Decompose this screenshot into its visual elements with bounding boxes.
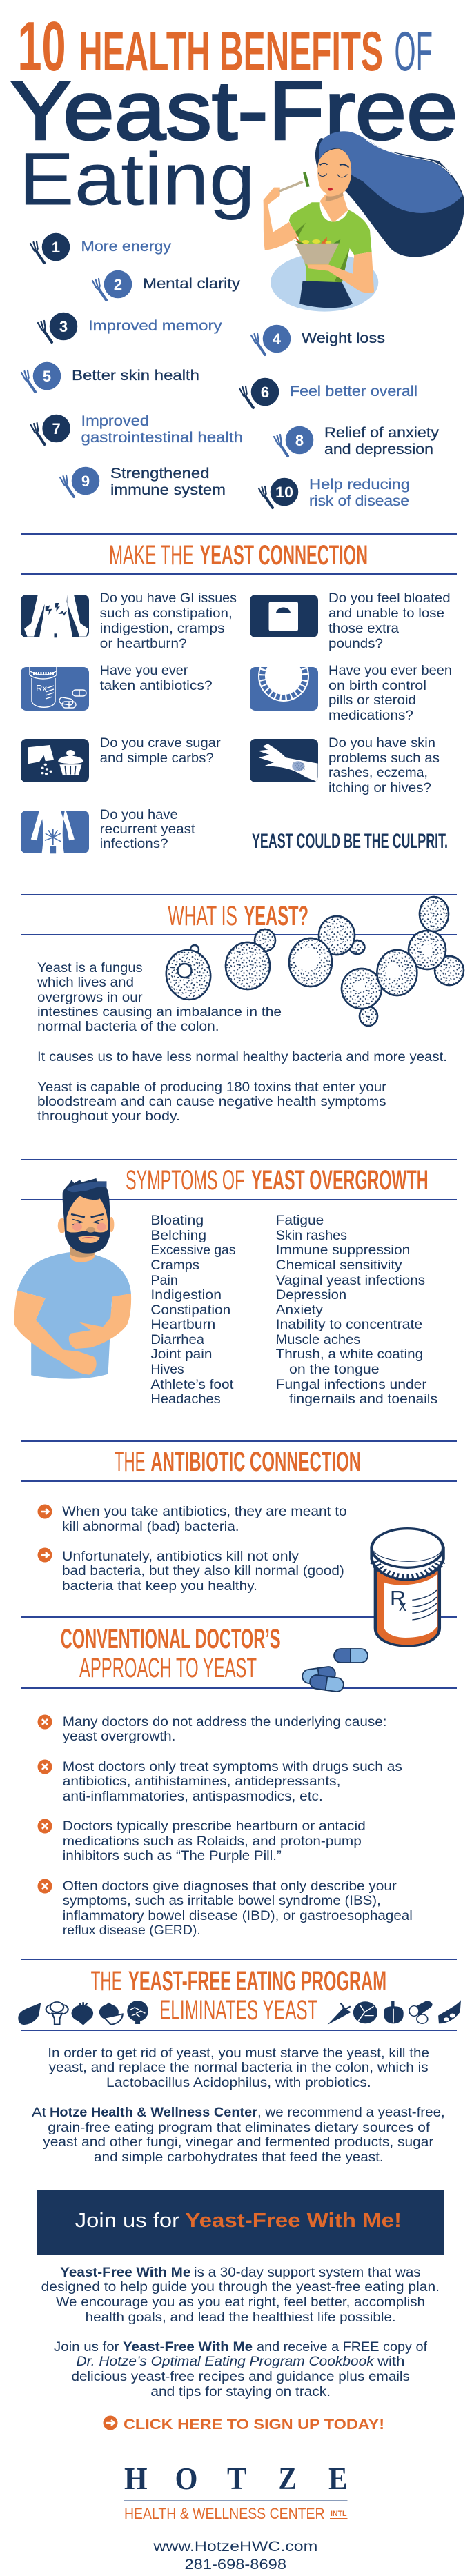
text block: symptoms left column: Heartburn (150, 1318, 215, 1332)
question: yeast infections: Do you have (100, 808, 178, 822)
text block: doctor bullets: medications such as Rolaids, and proton-pump (63, 1834, 362, 1849)
text block: yeast-free with me (41, 2266, 440, 2399)
text block: doctor bullets: reflux disease (GERD). (63, 1923, 201, 1938)
benefit 10: risk of disease (309, 493, 409, 509)
text block: yeast-free program: Lactobacillus Acidophilus, with probiotics. (106, 2076, 371, 2090)
heading: what is yeast: YEAST? (244, 901, 308, 931)
text block: symptoms right column: Chemical sensitivity (276, 1258, 402, 1273)
title: OF (395, 21, 433, 83)
text block: symptoms left column: Headaches (150, 1392, 221, 1407)
benefit 6: Feel better overall (290, 384, 417, 399)
contact details: www.HotzeHWC.com (153, 2539, 317, 2555)
icon: arm with skin rash (250, 739, 318, 782)
benefit 9 (60, 466, 226, 498)
heading: the antibiotic connection (115, 1447, 361, 1477)
benefit 8 (274, 425, 440, 457)
text block: doctor bullets: inflammatory bowel disease (IBD), or gastroesophageal (63, 1909, 413, 1923)
benefit 2: 2 (114, 276, 122, 293)
text block: yeast-free with me: Yeast-Free With Me (123, 2340, 253, 2355)
heading: conventional doctor's approach to yeast: CONVENTIONAL DOCTOR’S (61, 1624, 281, 1654)
text block: yeast-free with me: Dr. Hotze’s Optimal Eating Program Cookbook (76, 2355, 375, 2369)
icon: pill bottle (21, 667, 89, 711)
question: birth control: pills or steroid (328, 693, 416, 708)
benefit 8: 8 (295, 432, 304, 449)
text block: yeast-free program: , we recommend a yeast-free, (257, 2106, 445, 2120)
text block: symptoms right column: Depression (276, 1288, 346, 1302)
question: GI issues: Do you have GI issues (100, 591, 237, 606)
question: birth control: on birth control (328, 679, 426, 693)
benefits list (21, 232, 440, 509)
text block: symptoms left column: Indigestion (150, 1288, 222, 1302)
contact details: 281-698-8698 (185, 2557, 286, 2573)
text block: what is yeast: intestines causing an imbalance in the (37, 1005, 282, 1020)
icons: vegetables right (328, 2000, 461, 2025)
question: yeast infections: infections? (100, 837, 168, 851)
text block: antibiotic bullets: bacteria that keep you healthy. (62, 1579, 257, 1594)
text block: doctor bullets: yeast overgrowth. (63, 1730, 175, 1744)
illustration: capsules (302, 1649, 368, 1692)
text block: what is yeast: throughout your body. (37, 1109, 180, 1124)
logo: hotze: INTL (331, 2510, 347, 2518)
text block: what is yeast: It causes us to have less normal healthy bacteria and more yeast. (37, 1050, 447, 1064)
logo: hotze: H (124, 2461, 148, 2496)
text block: symptoms left column: Joint pain (150, 1347, 212, 1362)
banner: join us: Join us for (75, 2210, 179, 2232)
text block: symptoms left column: Pain (150, 1274, 178, 1288)
heading: make the yeast connection (109, 540, 368, 571)
benefit 7: gastrointestinal health (81, 430, 243, 446)
text block: yeast-free with me: delicious yeast-free recipes and guidance plus emails (72, 2370, 410, 2384)
text block: yeast-free with me: health goals, and lead the healthiest life possible. (86, 2310, 396, 2325)
text block: antibiotic bullets (37, 1504, 347, 1594)
benefit 3: 3 (59, 318, 68, 335)
question: antibiotics: taken antibiotics? (100, 679, 213, 693)
question: yeast infections (100, 808, 195, 851)
text block: symptoms left column: Athlete’s foot (150, 1378, 234, 1392)
text block: antibiotic bullets: When you take antibiotics, they are meant to (62, 1505, 347, 1519)
text block: yeast-free program: In order to get rid of yeast, you must starve the yeast, kill the (48, 2046, 429, 2061)
text block: doctor bullets: Most doctors only treat symptoms with drugs such as (63, 1760, 402, 1774)
question: skin (328, 736, 440, 795)
benefit 1: 1 (52, 239, 60, 256)
heading: the yeast-free eating program eliminates yeast: THE (91, 1966, 122, 1997)
heading: the antibiotic connection: THE (115, 1447, 145, 1477)
benefit 7: 7 (52, 420, 61, 437)
logo: hotze: O (175, 2461, 197, 2496)
text block: yeast-free program: and simple carbohydrates that feed the yeast. (94, 2150, 384, 2165)
benefit 10 (259, 477, 410, 509)
text block: yeast-free with me: designed to help guide you through the yeast-free eating plan. (41, 2280, 440, 2295)
text block: what is yeast: Yeast is a fungus (37, 961, 143, 975)
text block: what is yeast (37, 961, 447, 1124)
text block: antibiotic bullets: bad bacteria, but they also kill normal (good) (62, 1564, 344, 1578)
text block: symptoms left column: Constipation (150, 1303, 230, 1318)
benefit 2: Mental clarity (143, 276, 241, 292)
text block: symptoms left column: Hives (150, 1363, 184, 1377)
text block: symptoms right column: on the tongue (289, 1363, 380, 1377)
benefit 5: Better skin health (72, 368, 199, 384)
text block: doctor bullets (37, 1715, 413, 1938)
question: antibiotics: Have you ever (100, 664, 188, 678)
text block: symptoms left column: Excessive gas (150, 1243, 235, 1258)
question: skin: Do you have skin (328, 736, 435, 751)
question: GI issues (100, 591, 237, 651)
text block: yeast-free program (32, 2046, 445, 2165)
illustration: man with stomach ache (14, 1178, 131, 1379)
question: bloated: those extra (328, 622, 399, 636)
text block: yeast-free program: grain-free eating program that eliminates dietary sources of (48, 2121, 431, 2135)
text block: symptoms right column: Inability to concentrate (276, 1318, 422, 1332)
text block: doctor bullets: anti-inflammatories, antispasmodics, etc. (63, 1790, 323, 1804)
benefit 8: Relief of anxiety (324, 425, 440, 441)
text block: what is yeast: which lives and (37, 975, 134, 990)
text block: symptoms right column: Anxiety (276, 1303, 324, 1318)
text block: yeast-free with me: and tips for staying on track. (150, 2385, 331, 2399)
question: bloated: pounds? (328, 637, 383, 651)
text block: what is yeast: overgrows in our (37, 991, 143, 1005)
text block: what is yeast: Yeast is capable of producing 180 toxins that enter your (37, 1080, 387, 1095)
text block: yeast-free with me: and receive a FREE copy of (257, 2340, 428, 2355)
heading: conventional doctor's approach to yeast: APPROACH TO YEAST (79, 1653, 257, 1683)
heading: what is yeast: WHAT IS (168, 901, 237, 931)
question: bloated (328, 591, 451, 651)
question: skin: itching or hives? (328, 781, 431, 795)
icon: pill bottle: Rx (36, 683, 47, 693)
text block: symptoms right column: Vaginal yeast infections (276, 1274, 425, 1288)
text block: yeast-free program: yeast and other fungi, vinegar and fermented products, sugar (43, 2135, 434, 2150)
text block: symptoms right column: Muscle aches (276, 1333, 360, 1347)
illustration: prescription bottle: R (390, 1586, 406, 1610)
text block: symptoms right column (276, 1213, 437, 1407)
question: bloated: and unable to lose (328, 606, 444, 621)
question: GI issues: or heartburn? (100, 637, 187, 651)
text block: doctor bullets: Doctors typically prescribe heartburn or antacid (63, 1819, 366, 1834)
benefit 4: Weight loss (302, 330, 385, 346)
logo: hotze: E (328, 2461, 348, 2496)
question: GI issues: indigestion, cramps (100, 622, 225, 636)
text block: doctor bullets: Often doctors give diagnoses that only describe your (63, 1879, 397, 1894)
text block: yeast-free program: Hotze Health & Wellness Center (50, 2106, 258, 2120)
logo: hotze (124, 2461, 348, 2522)
question: birth control (328, 664, 452, 723)
benefit 9: 9 (81, 473, 90, 490)
text block: doctor bullets: symptoms, such as irritable bowel syndrome (IBS), (63, 1894, 381, 1908)
heading: the yeast-free eating program eliminates yeast: ELIMINATES YEAST (159, 1995, 317, 2025)
text block: yeast-free with me: Yeast-Free With Me (60, 2266, 190, 2280)
benefit 5 (21, 361, 199, 392)
question: sugar: Do you crave sugar (100, 736, 221, 751)
benefit 3: Improved memory (88, 318, 222, 334)
question: sugar (100, 736, 221, 766)
illustration: prescription bottle: x (399, 1597, 406, 1614)
question: antibiotics (100, 664, 213, 693)
text block: symptoms right column: Immune suppression (276, 1243, 410, 1258)
text block: what is yeast: bloodstream and can cause negative health symptoms (37, 1095, 386, 1109)
logo: hotze: Z (279, 2461, 297, 2496)
question: skin: rashes, eczema, (328, 766, 428, 780)
benefit 10: Help reducing (309, 477, 410, 493)
text block: yeast-free with me: with (377, 2355, 404, 2369)
text block: symptoms left column (150, 1213, 235, 1407)
icon: x bullet (37, 1759, 52, 1774)
question: sugar: and simple carbs? (100, 751, 214, 766)
text block: symptoms left column: Cramps (150, 1258, 199, 1273)
heading: symptoms of yeast overgrowth: SYMPTOMS OF (126, 1165, 244, 1196)
benefit 2 (92, 270, 241, 300)
text block: symptoms left column: Diarrhea (150, 1333, 204, 1347)
call to action: sign up: CLICK HERE TO SIGN UP TODAY! (124, 2417, 384, 2433)
text block: symptoms right column: Fatigue (276, 1213, 324, 1228)
title: 10 (18, 8, 66, 86)
benefit 6: 6 (261, 384, 269, 401)
logo: hotze: T (227, 2461, 247, 2496)
benefit 5: 5 (43, 368, 51, 385)
question: bloated: Do you feel bloated (328, 591, 451, 606)
icon: arrow bullet (37, 1548, 52, 1562)
benefit 9: immune system (110, 482, 226, 498)
title (10, 8, 458, 221)
question: GI issues: such as constipation, (100, 606, 233, 621)
benefit 4 (251, 324, 385, 355)
icons: vegetables left (18, 2001, 148, 2025)
benefit 1 (30, 232, 172, 263)
icon: sugar and cupcake (21, 739, 89, 782)
text block: doctor bullets: Many doctors do not address the underlying cause: (63, 1715, 387, 1730)
icon: weight scale (250, 595, 318, 637)
text block: yeast-free program: yeast, and replace the normal bacteria in the colon, which is (49, 2061, 429, 2075)
text block: doctor bullets: inhibitors such as “The Purple Pill.” (63, 1849, 282, 1863)
text block: antibiotic bullets: Unfortunately, antibiotics kill not only (62, 1549, 299, 1564)
icon: x bullet (37, 1819, 52, 1834)
heading: symptoms of yeast overgrowth (126, 1165, 429, 1196)
text block: symptoms left column: Belching (150, 1229, 206, 1243)
heading: conventional doctor's approach to yeast (61, 1624, 281, 1683)
text block: symptoms right column: Skin rashes (276, 1229, 347, 1243)
benefit 7 (31, 413, 243, 446)
logo: hotze: HEALTH & WELLNESS CENTER (124, 2505, 325, 2522)
title: Yeast-Free (10, 63, 458, 157)
text block: yeast-free with me: is a 30-day support system that was (194, 2266, 421, 2280)
heading: make the yeast connection: MAKE THE (109, 540, 194, 571)
icon: lower body infection (21, 811, 89, 853)
illustration: woman eating salad (264, 131, 464, 312)
panel: yeast connection questions (21, 591, 452, 853)
benefit 1: More energy (81, 239, 172, 255)
text block: yeast-free program: At (32, 2106, 47, 2120)
icon: x bullet (37, 1879, 52, 1893)
illustration: prescription bottle (372, 1529, 444, 1646)
text block: antibiotic bullets: kill abnormal (bad) bacteria. (62, 1520, 239, 1534)
benefit 8: and depression (324, 442, 433, 457)
heading: the yeast-free eating program eliminates yeast (91, 1966, 386, 2025)
text block: yeast-free with me: We encourage you as you eat right, feel better, accomplish (56, 2295, 425, 2310)
icon: stomach pain torso (21, 595, 89, 637)
text block: doctor bullets: antibiotics, antihistamines, antidepressants, (63, 1774, 340, 1789)
benefit 4: 4 (273, 330, 282, 348)
benefit 9: Strengthened (110, 466, 210, 482)
text block: symptoms right column: Thrush, a white coating (276, 1347, 423, 1362)
benefit 10: 10 (275, 484, 293, 501)
banner: join us: Yeast-Free With Me! (185, 2210, 402, 2232)
benefit 7: Improved (81, 413, 149, 429)
text block: yeast-free with me: Join us for (54, 2340, 119, 2355)
question: skin: problems such as (328, 751, 440, 766)
icon: x bullet (37, 1715, 52, 1729)
title: Eating (19, 137, 255, 221)
benefit 3 (38, 312, 222, 342)
contact details (153, 2539, 317, 2573)
text block: symptoms right column: Fungal infections under (276, 1378, 427, 1392)
icon: birth control pill pack (250, 667, 318, 711)
text block: symptoms left column: Bloating (150, 1213, 204, 1228)
text block: what is yeast: normal bacteria of the colon. (37, 1020, 219, 1034)
question: yeast infections: recurrent yeast (100, 822, 195, 837)
illustration: yeast cells (162, 897, 464, 1026)
banner: join us (37, 2190, 444, 2255)
text block: symptoms right column: fingernails and toenails (289, 1392, 437, 1407)
icon: arrow bullet (37, 1504, 52, 1519)
benefit 6 (239, 377, 417, 408)
question: birth control: Have you ever been (328, 664, 452, 678)
question: birth control: medications? (328, 709, 413, 723)
